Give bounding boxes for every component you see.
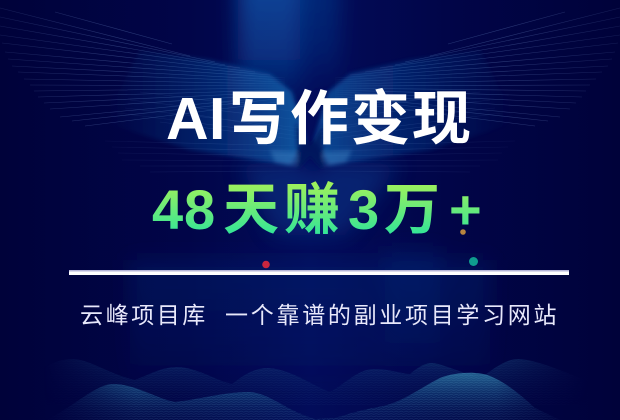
subtitle: green headline: 48天赚3万+ xyxy=(152,178,482,241)
tagline: 云峰项目库一个靠谱的副业项目学习网站 xyxy=(80,302,556,328)
centre glint xyxy=(270,122,352,170)
lower light beams xyxy=(130,250,490,390)
mountain waves xyxy=(64,359,559,420)
fan lines: right xyxy=(320,8,620,172)
dot: red xyxy=(262,261,270,268)
lower central glow xyxy=(240,160,400,235)
front wave layer xyxy=(45,373,560,420)
top light beam xyxy=(238,0,340,110)
glowing wing: left xyxy=(90,50,306,165)
title: AI写作变现 xyxy=(166,86,471,152)
dot: teal xyxy=(469,257,478,266)
back wave layer xyxy=(66,359,559,405)
divider line xyxy=(69,270,569,275)
dot: orange xyxy=(460,229,466,235)
fan lines: left xyxy=(0,8,300,172)
glowing wing: right xyxy=(314,50,530,165)
